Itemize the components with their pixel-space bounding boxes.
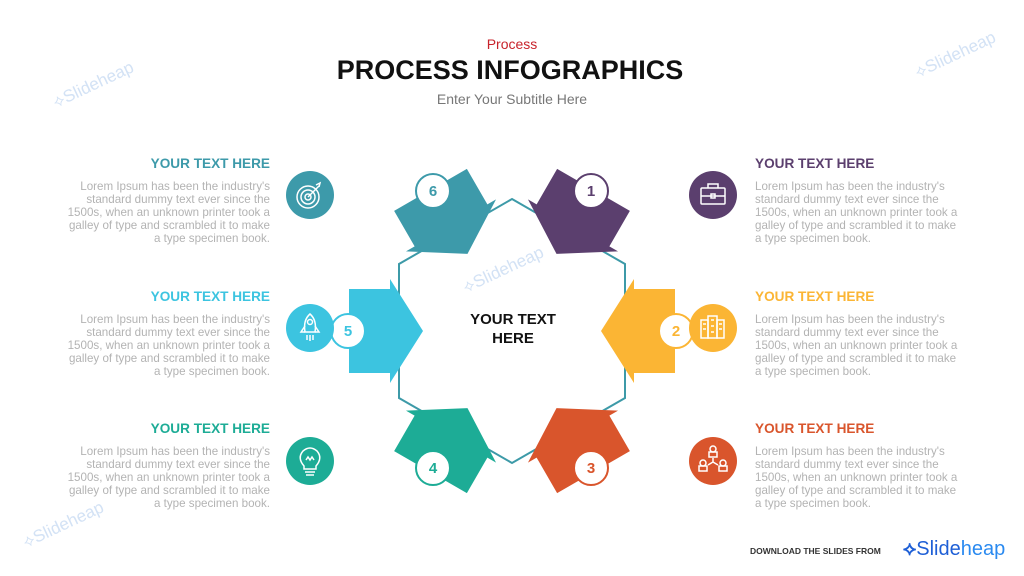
arrow 1 [511,164,639,280]
body 6: 1500s, when an unknown printer took a [68,206,270,219]
body 6: Lorem Ipsum has been the industry's [80,180,270,193]
watermark top left: ⟡Slideheap [50,58,137,112]
body 3: 1500s, when an unknown printer took a [755,471,957,484]
body 1: 1500s, when an unknown printer took a [755,206,957,219]
heading 1: YOUR TEXT HERE [755,156,874,171]
body 3: a type specimen book. [755,497,871,510]
body 5: standard dummy text ever since the [86,326,270,339]
watermark top right: ⟡Slideheap [912,28,999,82]
body 2: a type specimen book. [755,365,871,378]
body 1 [755,180,958,245]
body 4 [68,445,270,510]
number badges: 6 [429,183,437,200]
body 3: standard dummy text ever since the [755,458,939,471]
body 2: standard dummy text ever since the [755,326,939,339]
icon: target [286,171,334,219]
number badges: 3 [587,460,595,477]
body 5: 1500s, when an unknown printer took a [68,339,270,352]
body 2: galley of type and scrambled it to make [755,352,956,365]
body 1: standard dummy text ever since the [755,193,939,206]
panel 5 text [68,289,270,378]
header label: Process [487,36,537,52]
arrow 6 [385,164,513,280]
heading 2: YOUR TEXT HERE [755,289,874,304]
heading 3: YOUR TEXT HERE [755,421,874,436]
body 1: a type specimen book. [755,232,871,245]
body 6: a type specimen book. [154,232,270,245]
panel 3 text [755,421,958,510]
arrow 4 [385,382,513,498]
body 4: 1500s, when an unknown printer took a [68,471,270,484]
body 4: Lorem Ipsum has been the industry's [80,445,270,458]
body 4: galley of type and scrambled it to make [69,484,270,497]
arrow 5 [349,279,423,383]
body 4: a type specimen book. [154,497,270,510]
icon: bulb [286,437,334,485]
body 3 [755,445,958,510]
footer text: DOWNLOAD THE SLIDES FROM [750,546,881,556]
diagram: HERE [492,330,534,347]
body 5: Lorem Ipsum has been the industry's [80,313,270,326]
body 6: standard dummy text ever since the [86,193,270,206]
number badges: 2 [672,323,680,340]
panel 1 text [755,156,958,245]
number badges: 4 [429,460,438,477]
panel 4 text [68,421,270,510]
footer [750,538,1005,560]
body 5: galley of type and scrambled it to make [69,352,270,365]
heading 6: YOUR TEXT HERE [151,156,270,171]
arrow 3 [511,382,639,498]
icon: rocket [286,304,334,352]
body 6 [68,180,270,245]
number badges: 5 [344,323,352,340]
number badges [331,174,693,485]
body 2 [755,313,958,378]
body 3: galley of type and scrambled it to make [755,484,956,497]
icon: buildings [689,304,737,352]
heading 5: YOUR TEXT HERE [151,289,270,304]
title: PROCESS INFOGRAPHICS [337,55,683,85]
body 3: Lorem Ipsum has been the industry's [755,445,945,458]
body 6: galley of type and scrambled it to make [69,219,270,232]
watermark bottom left: ⟡Slideheap [20,498,107,552]
panel 6 text [68,156,270,245]
icon: briefcase [689,171,737,219]
arrow 2 [601,279,675,383]
subtitle: Enter Your Subtitle Here [437,91,587,107]
body 5 [68,313,270,378]
icon: network people [689,437,737,485]
body 2: 1500s, when an unknown printer took a [755,339,957,352]
body 4: standard dummy text ever since the [86,458,270,471]
center text: YOUR TEXT [470,311,556,328]
body 1: galley of type and scrambled it to make [755,219,956,232]
body 5: a type specimen book. [154,365,270,378]
heading 4: YOUR TEXT HERE [151,421,270,436]
number badges: 1 [587,183,595,200]
watermark center: ⟡Slideheap [460,243,547,297]
body 2: Lorem Ipsum has been the industry's [755,313,945,326]
hexagon outline [399,199,625,463]
body 1: Lorem Ipsum has been the industry's [755,180,945,193]
panel 2 text [755,289,958,378]
footer logo: ⟡Slideheap [903,538,1005,560]
